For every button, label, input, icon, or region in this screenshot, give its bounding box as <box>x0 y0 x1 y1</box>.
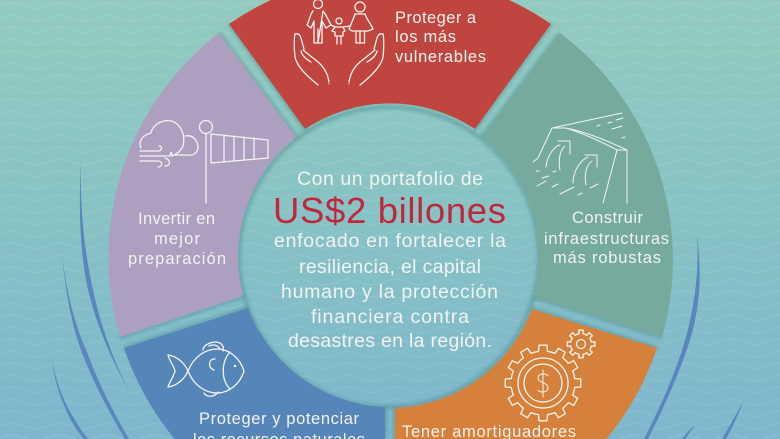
purple segment <box>109 33 296 337</box>
center text block: resiliencia, el capital <box>299 256 481 278</box>
label <box>128 210 226 268</box>
brush strokes: left <box>52 160 132 439</box>
green segment <box>482 33 673 337</box>
icon: family and hands <box>294 0 384 85</box>
center text block <box>273 168 506 352</box>
icon: fish <box>168 342 244 396</box>
label <box>193 410 365 439</box>
center text block: Con un portafolio de <box>297 168 483 190</box>
headline amount: US$2 billones <box>273 190 506 231</box>
label: más robustas <box>553 249 661 267</box>
label: infraestructuras <box>544 230 669 248</box>
center text block: enfocado en fortalecer la <box>274 230 506 252</box>
brush strokes: right <box>644 235 744 439</box>
label <box>544 209 669 267</box>
icon: cloud and windsock <box>140 120 268 203</box>
label: Proteger a <box>395 9 477 27</box>
label <box>395 9 486 66</box>
icon: large gear with dollar <box>505 345 581 421</box>
panel: tener amortiguadores <box>395 309 657 439</box>
label: Construir <box>572 209 644 227</box>
panel: proteger y potenciar los recursos naturales <box>124 308 385 439</box>
label: preparación <box>128 250 226 268</box>
icon: dam <box>533 113 627 203</box>
label: vulnerables <box>395 48 486 66</box>
gap shadows between segments <box>120 24 662 439</box>
icon: small gear <box>567 330 595 358</box>
red segment <box>229 0 551 129</box>
label: mejor <box>154 230 200 248</box>
panel: proteger a los más vulnerables <box>229 0 551 129</box>
panel: invertir en mejor preparación <box>109 33 296 337</box>
label: Invertir en <box>138 210 215 228</box>
orange segment <box>395 309 657 439</box>
label: Proteger y potenciar <box>199 410 360 428</box>
label: los más <box>395 28 456 46</box>
center text block: humano y la protección <box>281 281 498 303</box>
blue segment <box>124 308 385 439</box>
center text block: desastres en la región. <box>288 330 492 352</box>
panel: construir infraestructuras más robustas <box>482 33 673 337</box>
center text block: financiera contra <box>311 306 469 328</box>
